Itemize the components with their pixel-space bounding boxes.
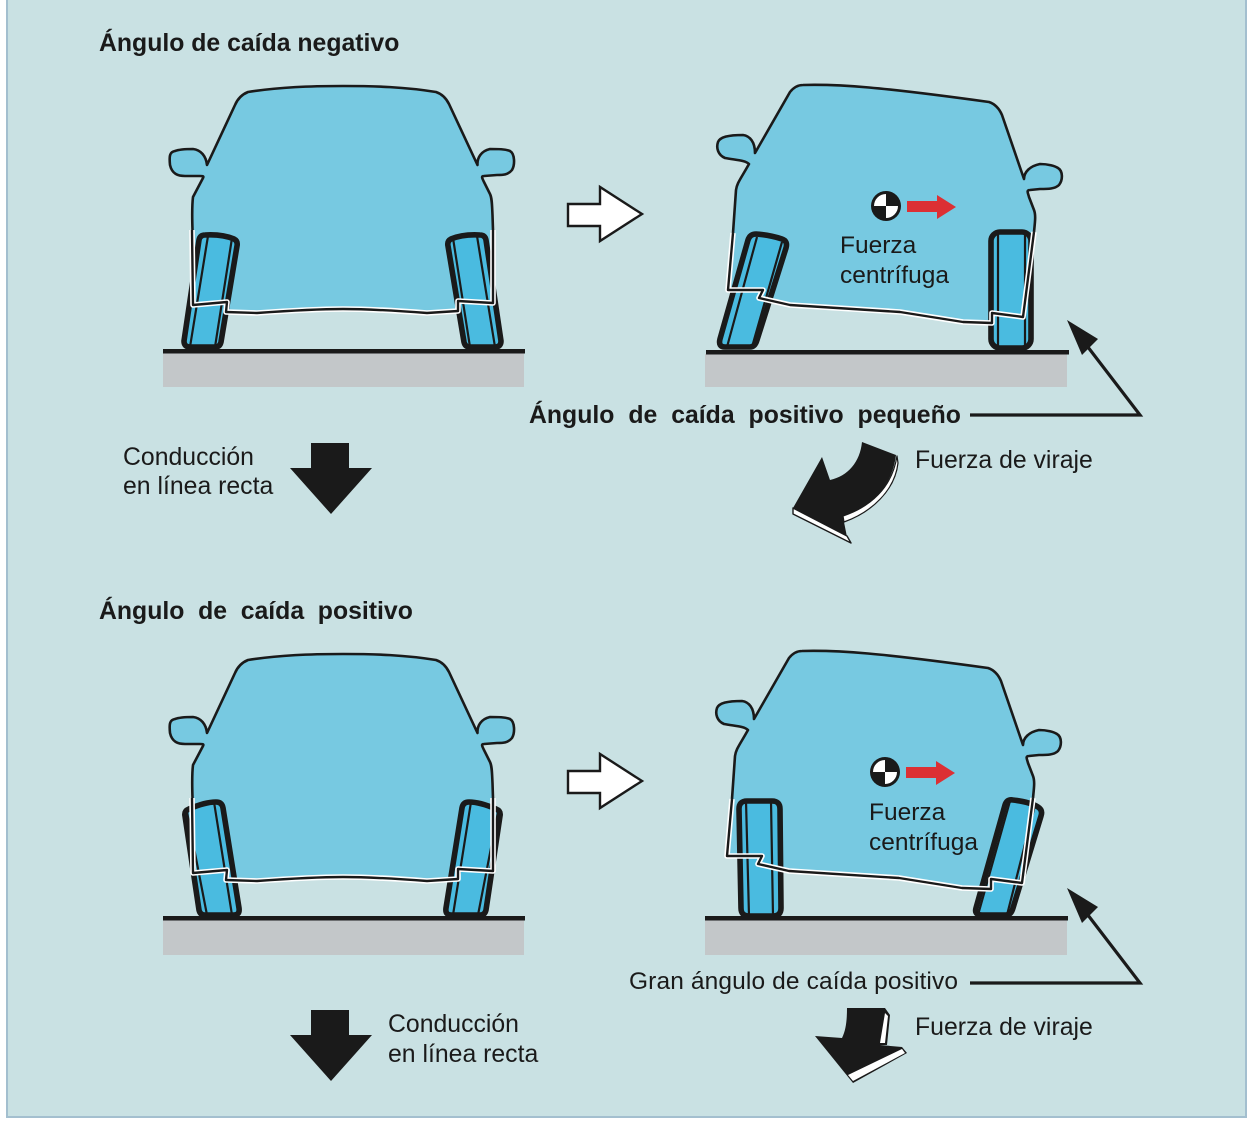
label: centrifugal force top: centrífuga <box>840 262 949 289</box>
icon: centre of gravity bottom <box>870 757 900 787</box>
label: straight driving top: en línea recta <box>123 473 273 500</box>
arrow: straight down bottom <box>290 1010 372 1081</box>
label: cornering force bottom: Fuerza de viraje <box>915 1014 1093 1041</box>
pointer: large positive camber <box>970 888 1140 983</box>
pointer: small positive camber <box>970 320 1140 415</box>
car: positive camber cornering <box>716 651 1061 916</box>
arrow: straight down top <box>290 443 372 514</box>
tyre: right <box>448 235 501 347</box>
road: top right <box>705 350 1069 387</box>
label: cornering force top: Fuerza de viraje <box>915 447 1093 474</box>
arrow: centrifugal force top <box>907 195 956 219</box>
heading: negative camber: Ángulo de caída negativo <box>99 29 399 57</box>
road: bottom right <box>705 916 1068 955</box>
tyre: right leaning <box>976 800 1042 915</box>
heading: positive camber: Ángulo de caída positivo <box>99 597 413 625</box>
car: negative camber cornering <box>717 85 1062 348</box>
label: straight driving bottom: Conducción <box>388 1011 519 1038</box>
car: positive camber straight <box>170 654 514 915</box>
arrow: hollow transition top <box>568 187 642 241</box>
arrow: centrifugal force bottom <box>906 761 955 785</box>
car: negative camber straight <box>170 86 514 347</box>
label: straight driving top: Conducción <box>123 444 254 471</box>
label: centrifugal force bottom: centrífuga <box>869 829 978 856</box>
tyre: right <box>446 802 500 915</box>
label: centrifugal force bottom: Fuerza <box>869 799 946 826</box>
tyre: right upright <box>991 232 1031 348</box>
label: centrifugal force top: Fuerza <box>840 232 917 259</box>
label: straight driving bottom: en línea recta <box>388 1041 538 1068</box>
arrow: hollow transition bottom <box>568 754 642 808</box>
arrow: small cornering force bottom <box>815 1008 907 1083</box>
road: bottom left <box>163 916 525 955</box>
label: small positive camber: Ángulo de caída positivo pequeño <box>529 401 961 429</box>
tyre: left <box>184 235 237 347</box>
label: large positive camber: Gran ángulo de caída positivo <box>629 968 958 995</box>
tyre: left <box>185 802 239 915</box>
icon: centre of gravity top <box>871 191 901 221</box>
arrow: curved cornering force top <box>793 442 898 543</box>
tyre: left leaning <box>720 234 786 347</box>
road: top left <box>163 349 525 387</box>
tyre: left upright <box>739 801 781 916</box>
